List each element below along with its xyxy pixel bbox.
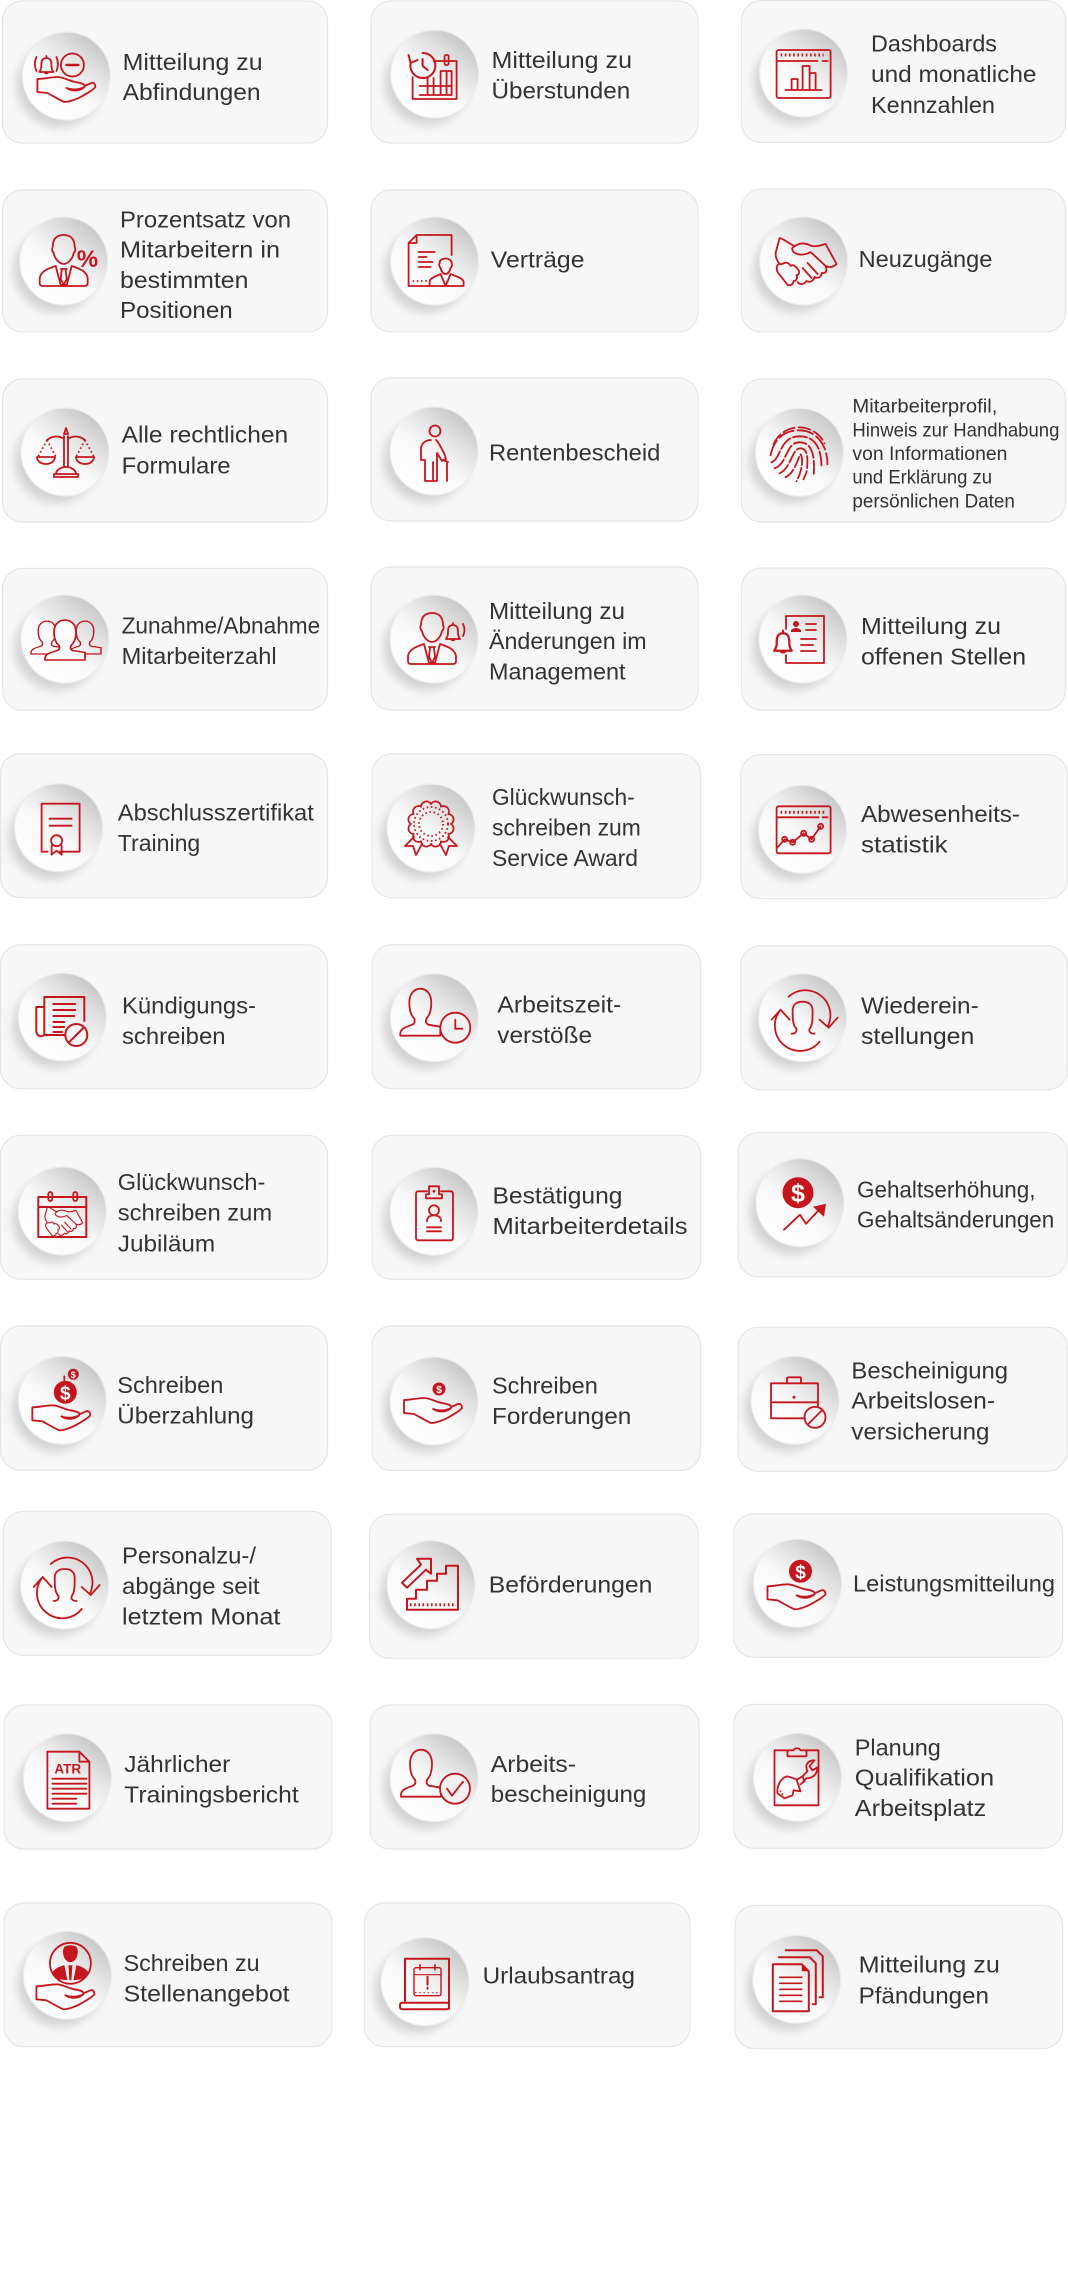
label: Jährlicher	[124, 1751, 230, 1777]
label	[117, 1372, 254, 1428]
label: Kennzahlen	[871, 92, 995, 118]
card: Planung Qualifikation Arbeitsplatz	[734, 1704, 1063, 1848]
label: Glückwunsch-	[118, 1169, 265, 1195]
label	[122, 422, 288, 478]
icon: stack of documents	[773, 1950, 823, 2011]
icon: leave request form	[400, 1959, 449, 2009]
label: schreiben zum	[492, 815, 641, 841]
label	[497, 992, 621, 1048]
card: Mitteilung zu offenen Stellen	[742, 568, 1066, 710]
label: Service Award	[492, 845, 638, 871]
label: Bestätigung	[492, 1182, 622, 1208]
label: Abfindungen	[123, 79, 261, 105]
panel	[0, 1135, 328, 1279]
panel	[742, 0, 1066, 142]
icon: line chart window	[777, 806, 831, 853]
panel	[0, 754, 328, 898]
label: Glückwunsch-	[492, 784, 635, 810]
label: Planung	[855, 1734, 941, 1760]
card: Glückwunschschreiben Jubiläum	[0, 1135, 328, 1279]
card: Glückwunschschreiben Service Award	[372, 754, 700, 898]
label: Alle rechtlichen	[122, 422, 288, 448]
label: Trainingsbericht	[124, 1781, 299, 1807]
icon: briefcase with prohibition sign	[771, 1377, 826, 1428]
label	[861, 613, 1026, 669]
label: Formulare	[122, 452, 231, 478]
label: Mitarbeitern in	[120, 237, 280, 263]
card: Rentenbescheid	[371, 378, 698, 521]
card: Mitteilung zu Überstunden	[371, 1, 698, 143]
label	[491, 1751, 646, 1807]
icon disc	[748, 1539, 842, 1634]
panel	[372, 945, 700, 1089]
icon: hand with dollar coin	[768, 1560, 826, 1609]
card: Kündigungsschreiben	[0, 945, 328, 1089]
icon: hand with two coins: $	[60, 1383, 71, 1404]
panel	[0, 1326, 328, 1470]
label: Änderungen im	[489, 628, 647, 654]
icon disc	[15, 1541, 109, 1636]
icon disc	[384, 974, 478, 1069]
icon disc	[385, 217, 479, 312]
panel	[734, 1514, 1063, 1657]
label	[124, 1950, 290, 2006]
icon: document with bell	[774, 616, 824, 663]
label: statistik	[861, 832, 948, 858]
label	[123, 49, 263, 105]
card: Mitteilung zu Änderungen im Management	[371, 567, 698, 710]
card: Mitarbeiterprofil	[742, 379, 1066, 522]
icon: manager with percent: %	[77, 246, 98, 273]
icon: person with clock	[400, 989, 470, 1043]
label: letztem Monat	[122, 1603, 281, 1629]
label: Hinweis zur Handhabung	[852, 419, 1059, 441]
label: Urlaubsantrag	[483, 1963, 635, 1989]
label	[861, 992, 979, 1049]
label: Rentenbescheid	[489, 439, 660, 465]
panel	[372, 754, 700, 898]
label: Beförderungen	[489, 1572, 652, 1598]
label	[855, 1734, 994, 1821]
label	[852, 395, 1059, 512]
icon disc	[375, 1938, 469, 2033]
label	[120, 206, 291, 323]
icon: fingerprint	[770, 427, 828, 481]
panel	[370, 1705, 699, 1849]
icon disc	[14, 217, 108, 312]
icon: person with check mark	[401, 1750, 470, 1804]
panel	[4, 1903, 332, 2047]
card: Abwesenheitsstatistik	[741, 755, 1068, 899]
icon: hand with bell and minus	[35, 54, 95, 102]
label: Stellenangebot	[124, 1980, 290, 2006]
label: Abwesenheits-	[861, 801, 1020, 827]
label: Training	[118, 830, 200, 856]
icon disc	[384, 595, 478, 690]
icon disc	[13, 1167, 106, 1262]
label: bescheinigung	[491, 1781, 646, 1807]
label: Überzahlung	[117, 1402, 254, 1428]
label: Wiederein-	[861, 992, 979, 1018]
icon: certificate	[42, 804, 80, 855]
icon disc	[13, 1356, 106, 1451]
label: Prozentsatz von	[120, 206, 291, 232]
label	[489, 598, 647, 684]
label: Mitarbeiterzahl	[122, 643, 277, 669]
label: Gehaltsänderungen	[857, 1207, 1054, 1233]
label	[492, 47, 632, 104]
label: Kündigungs-	[122, 992, 256, 1018]
icon disc	[753, 974, 847, 1069]
icon: elderly person with cane	[421, 426, 448, 481]
label	[851, 1357, 1008, 1444]
icon disc	[753, 785, 847, 880]
card: Mitteilung zu Pfändungen	[735, 1905, 1063, 2049]
label: und monatliche	[871, 61, 1036, 87]
label: stellungen	[861, 1023, 974, 1049]
icon: hand with dollar coin: $	[795, 1562, 806, 1583]
label	[122, 613, 320, 669]
icon: dollar coin with rising arrow	[782, 1177, 826, 1230]
label: Positionen	[120, 297, 233, 323]
label: Gehaltserhöhung,	[857, 1176, 1036, 1202]
label: und Erklärung zu	[852, 467, 992, 489]
icon disc	[754, 217, 848, 312]
label: Schreiben zu	[124, 1950, 260, 1976]
label: Mitteilung zu	[489, 598, 625, 624]
icon disc	[381, 1541, 475, 1636]
icon: hand with two coins	[32, 1369, 90, 1430]
panel	[372, 1135, 700, 1279]
panel	[372, 1326, 700, 1470]
icon: person in cycle arrows	[772, 990, 838, 1051]
label: Zunahme/Abnahme	[122, 613, 320, 639]
card: Alle rechtlichen Formulare	[2, 379, 328, 522]
label: Überstunden	[492, 78, 630, 104]
icon: ATR report: ATR	[54, 1762, 81, 1777]
card: Gehaltserhöhung	[738, 1133, 1067, 1277]
panel	[371, 190, 698, 332]
label: Forderungen	[492, 1403, 631, 1429]
icon disc	[384, 1734, 478, 1829]
icon disc	[750, 1159, 844, 1254]
icon: calendar with handshake	[38, 1192, 86, 1237]
label: Schreiben	[117, 1372, 223, 1398]
label	[118, 1169, 272, 1256]
icon disc	[753, 595, 847, 690]
icon: clipboard with wrench	[774, 1748, 818, 1805]
label: Mitteilung zu	[859, 1952, 1000, 1978]
icon disc	[18, 1931, 111, 2026]
label	[861, 801, 1020, 858]
icon: hand with two coins: $	[71, 1370, 76, 1380]
icon: handshake	[776, 238, 837, 285]
icon: three people	[31, 620, 101, 660]
label: persönlichen Daten	[852, 490, 1015, 512]
label: Mitteilung zu	[123, 49, 263, 75]
label: Dashboards	[871, 31, 997, 57]
card: Urlaubsantrag	[364, 1903, 690, 2047]
icon disc	[384, 407, 478, 502]
icon disc	[9, 784, 103, 879]
icon: ID badge	[416, 1186, 453, 1240]
label: Verträge	[491, 246, 584, 272]
card: Abschlusszertifikat Training	[0, 754, 328, 898]
label: Abschlusszertifikat	[118, 800, 314, 826]
icon: calendar with clock	[409, 53, 457, 99]
label	[124, 1751, 299, 1807]
panel	[371, 378, 698, 521]
panel	[0, 945, 328, 1089]
panel	[2, 568, 328, 710]
card: Bescheinigung Arbeitslosenversicherung	[738, 1327, 1067, 1471]
label: Leistungsmitteilung	[853, 1571, 1055, 1597]
label	[871, 31, 1036, 118]
icon: ATR report	[47, 1752, 89, 1809]
icon disc	[384, 1357, 478, 1452]
label: Mitarbeiterprofil,	[852, 395, 997, 417]
card: Beförderungen	[370, 1514, 698, 1658]
icon disc	[747, 1935, 841, 2030]
icon disc	[15, 595, 109, 690]
icon: letter with prohibition sign	[36, 997, 87, 1046]
label	[118, 800, 314, 856]
label: Mitteilung zu	[492, 47, 632, 73]
label: abgänge seit	[122, 1573, 260, 1599]
card: Schreiben zu Stellenangebot	[4, 1903, 332, 2047]
panel	[735, 1905, 1063, 2049]
label	[857, 1176, 1054, 1233]
panel	[738, 1133, 1067, 1277]
label: Mitteilung zu	[861, 613, 1001, 639]
icon: hand with coin: $	[436, 1384, 442, 1396]
icon: contract with person	[409, 235, 464, 286]
panel	[2, 1, 328, 143]
icon disc	[385, 30, 479, 125]
icon: stairs with arrow	[402, 1559, 458, 1610]
icon disc	[17, 32, 110, 127]
card: Wiedereinstellungen	[741, 946, 1068, 1090]
label: von Informationen	[852, 443, 1007, 465]
label: schreiben	[122, 1023, 226, 1049]
icon disc	[745, 1356, 839, 1451]
icon disc	[15, 408, 109, 503]
label: Bescheinigung	[851, 1357, 1008, 1383]
panel	[4, 1705, 332, 1849]
card: Arbeitsbescheinigung	[370, 1705, 699, 1849]
label	[859, 1952, 1000, 2008]
panel	[370, 1514, 698, 1658]
label	[492, 1373, 631, 1429]
label	[122, 992, 256, 1049]
panel	[371, 567, 698, 710]
card: Personalzu-/abgänge	[3, 1511, 331, 1655]
label	[492, 1182, 688, 1239]
label: Arbeits-	[491, 1751, 576, 1777]
card: Jährlicher Trainingsbericht	[4, 1705, 332, 1849]
icon disc	[13, 973, 106, 1068]
label: Pfändungen	[859, 1982, 989, 2008]
icon: dollar coin with rising arrow: $	[791, 1180, 805, 1208]
icon disc	[384, 1167, 478, 1262]
label: Mitarbeiterdetails	[492, 1213, 688, 1239]
card: Zunahme/Abnahme Mitarbeiterzahl	[2, 568, 328, 710]
card: Arbeitszeitverstöße	[372, 945, 700, 1089]
card: Neuzugänge	[742, 189, 1066, 332]
label: Schreiben	[492, 1373, 598, 1399]
panel	[742, 568, 1066, 710]
label: Arbeitszeit-	[497, 992, 621, 1018]
icon disc	[18, 1734, 111, 1829]
label: Jubiläum	[118, 1230, 215, 1256]
label: Qualifikation	[855, 1765, 994, 1791]
label	[122, 1542, 281, 1629]
icon: scales	[37, 428, 94, 477]
card: Mitteilung zu Abfindungen	[2, 1, 328, 143]
label: Personalzu-/	[122, 1542, 256, 1568]
panel	[2, 379, 328, 522]
label: schreiben zum	[118, 1200, 272, 1226]
label: Neuzugänge	[859, 246, 992, 272]
card: Dashboards und monatliche Kennzahlen	[742, 0, 1066, 142]
panel	[3, 1511, 331, 1655]
panel	[364, 1903, 690, 2047]
label: Arbeitsplatz	[855, 1795, 986, 1821]
panel	[741, 946, 1068, 1090]
panel	[742, 189, 1066, 332]
panel	[742, 379, 1066, 522]
icon disc	[750, 408, 844, 503]
icon: hand holding person	[36, 1943, 94, 2009]
panel	[741, 755, 1068, 899]
card: Prozentsatz von Mitarbeitern	[2, 190, 328, 332]
icon disc	[748, 1733, 842, 1828]
icon disc	[754, 29, 848, 124]
card: Leistungsmitteilung	[734, 1514, 1063, 1657]
card: Schreiben Überzahlung	[0, 1326, 328, 1470]
label: verstöße	[497, 1022, 592, 1048]
label: offenen Stellen	[861, 643, 1026, 669]
label	[492, 784, 641, 871]
card: Schreiben Forderungen	[372, 1326, 700, 1470]
icon: person in cycle arrows	[34, 1558, 100, 1618]
icon: manager with bell	[408, 613, 464, 664]
panel	[734, 1704, 1063, 1848]
panel	[371, 1, 698, 143]
label: versicherung	[851, 1418, 989, 1444]
label: Arbeitslosen-	[851, 1388, 995, 1414]
panel	[2, 190, 328, 332]
label: bestimmten	[120, 267, 248, 293]
card: Verträge	[371, 190, 698, 332]
icon: award rosette	[405, 801, 457, 855]
label: Management	[489, 658, 626, 684]
icon: manager with percent	[40, 235, 98, 286]
card: Bestätigung Mitarbeiterdetails	[372, 1135, 700, 1279]
icon disc	[381, 784, 475, 879]
panel	[738, 1327, 1067, 1471]
icon: hand with coin	[404, 1382, 462, 1423]
icon: dashboard window	[777, 50, 831, 98]
